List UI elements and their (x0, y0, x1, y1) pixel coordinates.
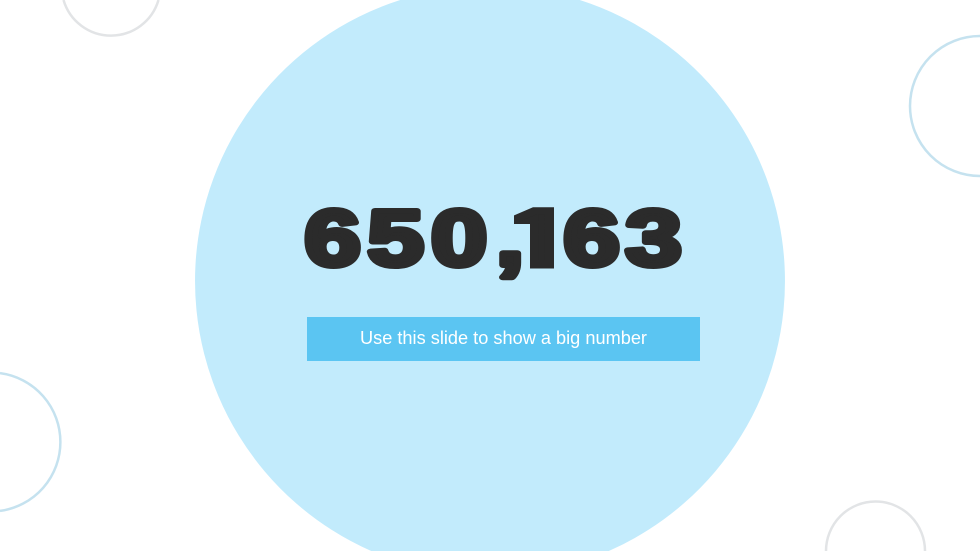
big number: 650, (305, 194, 524, 282)
outline circle: bottom right (826, 502, 925, 551)
outline circle: top left (64, 0, 158, 36)
big number: 63 (563, 194, 682, 282)
big number (304, 207, 682, 280)
outline circle: bottom left (0, 373, 60, 511)
caption background (307, 317, 700, 361)
large central circle (195, 0, 785, 551)
caption bar (307, 317, 700, 361)
outline circle: right (910, 36, 980, 176)
caption text: Use this slide to show a big number (360, 328, 647, 348)
big number: 1 (506, 194, 572, 282)
